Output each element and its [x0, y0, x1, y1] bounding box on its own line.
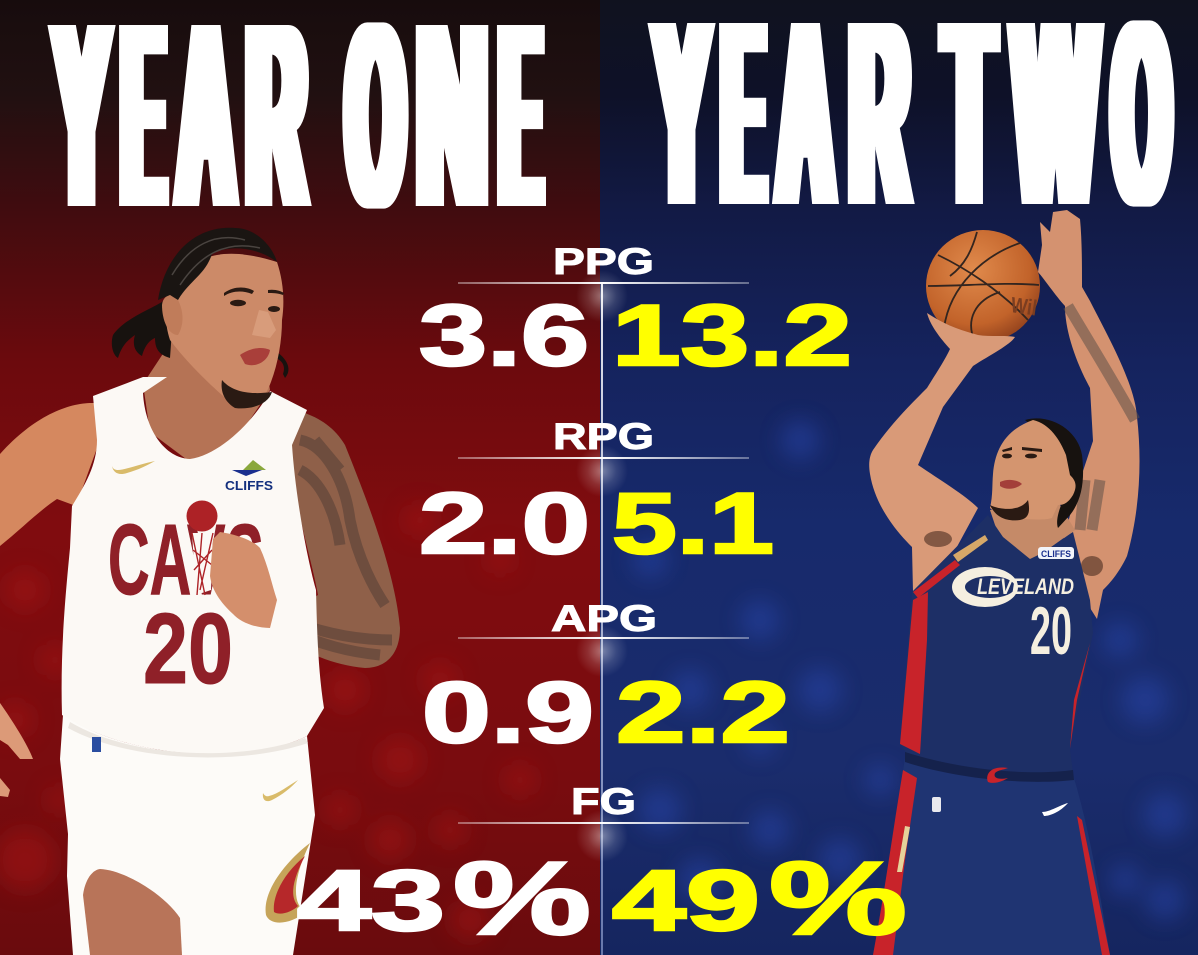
- left arm: [0, 403, 100, 546]
- head: [166, 254, 283, 405]
- hair: [1025, 418, 1083, 528]
- stat row: PPG: 3.6: [419, 288, 589, 384]
- stat row: FG: [297, 781, 907, 955]
- stat row: FG: %: [769, 841, 907, 955]
- center divider: [601, 283, 603, 955]
- sponsor: [1038, 547, 1074, 559]
- shorts logos: [987, 767, 1008, 783]
- stat row: RPG: 2.0: [419, 476, 590, 572]
- stat row: RPG: RPG: [553, 416, 654, 457]
- beard: [222, 380, 272, 408]
- shooting arm: [869, 313, 1015, 592]
- hand on chest: [210, 532, 277, 628]
- stat row: APG: [422, 598, 790, 761]
- mouth: [240, 348, 270, 365]
- stat row: RPG: 5.1: [612, 476, 774, 572]
- raised arm and hand: [1038, 210, 1140, 619]
- player: year two in navy Cleveland uniform: [869, 210, 1140, 955]
- jersey: [900, 515, 1093, 773]
- stat row: FG: 43: [297, 853, 445, 949]
- player: year two in navy Cleveland uniform: CLIFFS: [1041, 549, 1071, 560]
- ponytail braids: [112, 300, 172, 358]
- underarm shadow: [924, 531, 952, 547]
- nike swoosh: [112, 461, 155, 474]
- panel: year two background: [600, 0, 1198, 955]
- braided hair: [158, 228, 277, 300]
- jersey wordmark: CAVS: [108, 504, 264, 616]
- stat row: APG: 0.9: [422, 665, 594, 761]
- basketball: [926, 230, 1040, 342]
- eyes and mouth: [1002, 447, 1042, 452]
- jersey number: 20: [143, 593, 233, 705]
- jersey wordmark: [952, 567, 1074, 607]
- nose: [252, 310, 276, 338]
- stats table: [297, 241, 907, 955]
- shorts: [60, 715, 315, 955]
- stat row: PPG: [419, 241, 852, 384]
- neck: [990, 500, 1075, 562]
- beard: [990, 500, 1029, 520]
- neck and chest: [143, 340, 270, 462]
- stat row: PPG: 13.2: [612, 288, 852, 384]
- shorts: [873, 758, 1110, 955]
- shorts logo flame: [266, 843, 310, 923]
- stat row: RPG: [419, 416, 774, 572]
- stat row: PPG: PPG: [553, 241, 654, 282]
- panel: year one background: [0, 0, 600, 955]
- jersey wordmark: LEVELAND: [977, 574, 1074, 599]
- ear: [162, 295, 182, 335]
- tattooed arm: [270, 412, 400, 668]
- player: year one in white Cavs uniform: [0, 228, 400, 955]
- stat row: FG: FG: [571, 781, 636, 822]
- jersey number: 20: [1030, 593, 1072, 669]
- jersey: [62, 377, 324, 754]
- left hand fragments: [0, 703, 33, 797]
- stat row: APG: 2.2: [616, 665, 790, 761]
- ball logo: [186, 500, 218, 532]
- stat row: FG: 49: [612, 853, 760, 949]
- leg: [83, 869, 182, 955]
- NBA logo: [92, 737, 101, 752]
- sponsor: CLIFFS: [225, 479, 273, 493]
- jersey red side panels: [900, 592, 928, 754]
- head: [990, 420, 1076, 520]
- stat row: APG: APG: [551, 598, 657, 639]
- waistband: [905, 752, 1074, 782]
- basketball: Wil: [1009, 292, 1039, 321]
- eyes and brows: [224, 288, 284, 296]
- stat row: FG: %: [453, 841, 591, 955]
